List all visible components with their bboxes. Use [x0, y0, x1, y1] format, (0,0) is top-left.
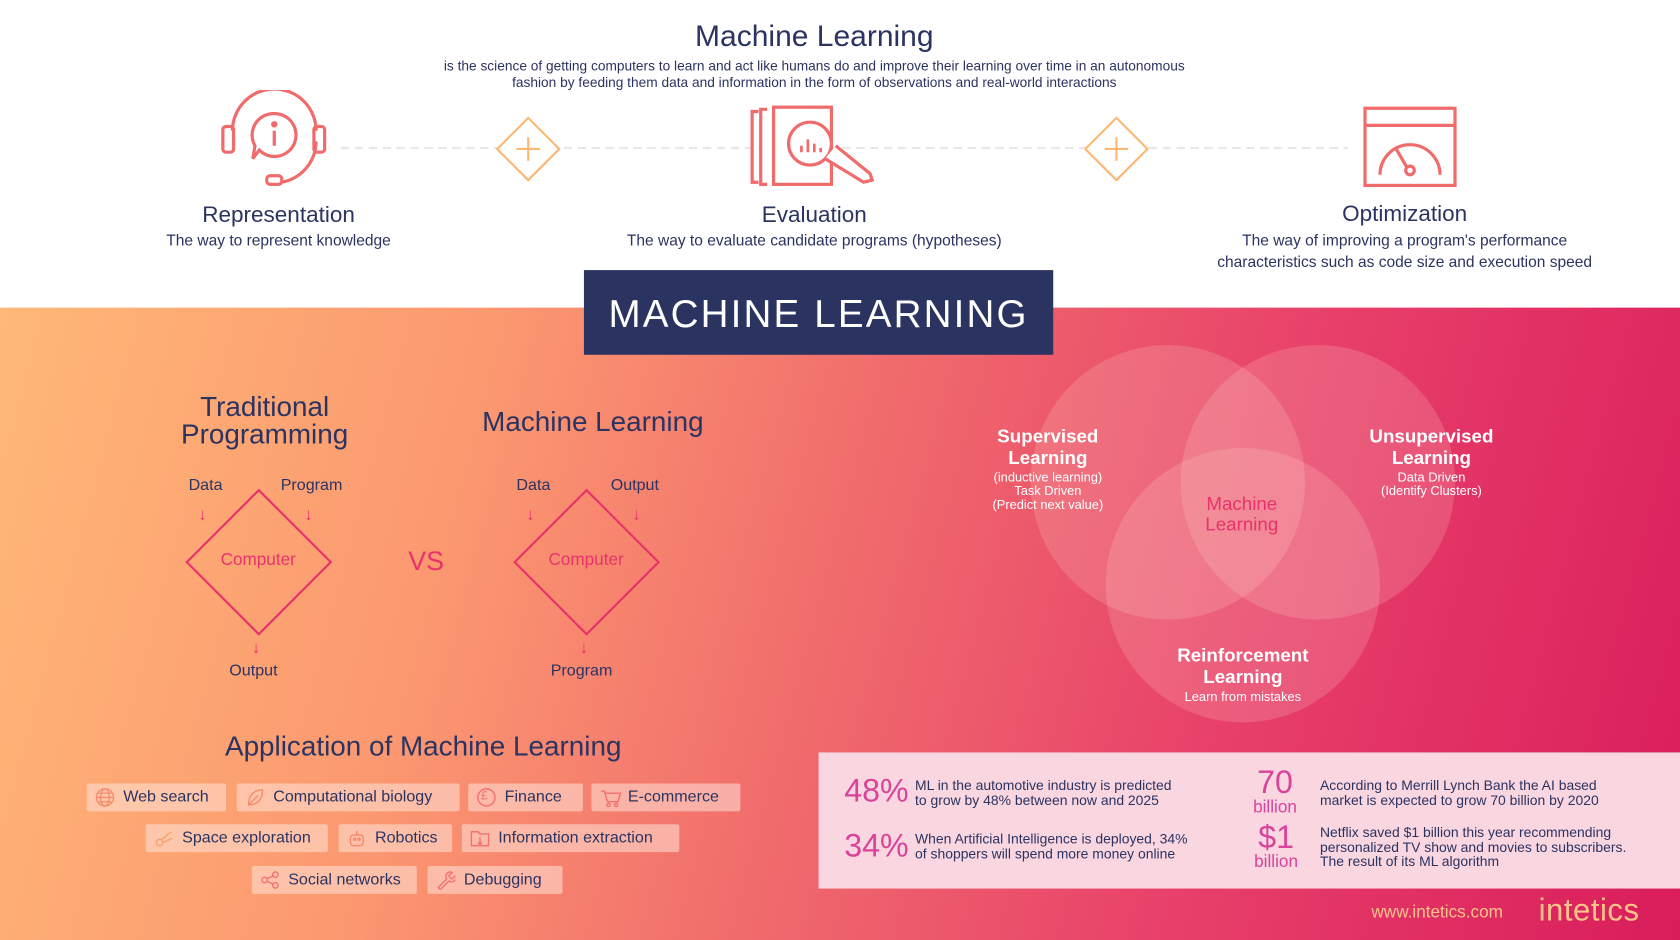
tag: finance: £	[481, 790, 488, 803]
panel: statistics	[819, 752, 1680, 889]
footer url: www.intetics.com	[1371, 904, 1503, 922]
stat: $1 billion: $1	[1258, 820, 1294, 855]
venn label: unsupervised: Data Driven	[1397, 469, 1465, 484]
stat: 70 billion	[1253, 765, 1297, 817]
venn label: center: Machine	[1206, 493, 1277, 514]
panel: machine learning flow: ↓	[632, 506, 641, 524]
venn label: supervised: Learning	[1008, 447, 1087, 468]
tag: finance	[468, 784, 583, 811]
diamond	[513, 489, 660, 636]
panel: machine learning flow: ↓	[580, 639, 588, 657]
panel: statistics: When Artificial Intelligence is deployed, 34%	[915, 831, 1188, 847]
tag: information extraction: Information extraction	[498, 829, 653, 847]
venn label: supervised	[992, 426, 1103, 512]
heading: optimization	[1217, 202, 1592, 271]
panel: traditional programming: ↓	[304, 506, 313, 524]
panel: machine learning flow: Program	[551, 661, 612, 680]
panel: machine learning flow: Output	[611, 476, 659, 494]
venn label: unsupervised: Unsupervised	[1369, 426, 1493, 447]
panel: machine learning flow	[482, 405, 704, 680]
tag: finance: Finance	[505, 788, 562, 806]
tag: web search	[87, 784, 226, 811]
venn label: unsupervised: (Identify Clusters)	[1381, 483, 1482, 498]
subtitle	[444, 58, 1185, 90]
venn label: supervised: Supervised	[997, 426, 1098, 447]
heading: evaluation	[627, 203, 1002, 250]
panel: statistics: ML in the automotive industry is predicted	[915, 777, 1172, 793]
panel: traditional programming: Computer	[221, 551, 296, 569]
subtitle: is the science of getting computers to learn and act like humans do and improve their learning over time in an autonomous	[444, 58, 1185, 74]
stat: 48%: 48%	[844, 774, 909, 809]
tag: e-commerce: E-commerce	[628, 788, 719, 806]
panel: statistics: market is expected to grow 70 billion by 2020	[1320, 792, 1599, 808]
tag: social networks: Social networks	[288, 870, 401, 889]
heading: representation: The way to represent knowledge	[166, 233, 391, 250]
tag: information extraction	[462, 824, 679, 852]
heading: optimization: The way of improving a program's performance	[1242, 233, 1567, 250]
tag: e-commerce	[591, 784, 740, 811]
application tags	[86, 784, 740, 894]
venn label: center: Learning	[1205, 513, 1278, 535]
heading: evaluation: Evaluation	[762, 203, 867, 227]
dashed connector line	[340, 147, 1348, 149]
heading	[181, 390, 348, 450]
logo: intetics: intetics	[1539, 894, 1640, 928]
venn label: supervised: Task Driven	[1014, 483, 1081, 498]
stat: 70 billion: 70	[1257, 765, 1293, 801]
panel: traditional programming	[181, 390, 348, 680]
heading: Programming	[181, 418, 348, 450]
banner: MACHINE LEARNING: MACHINE LEARNING	[609, 292, 1029, 335]
stat: $1 billion: billion	[1254, 853, 1298, 871]
icon: plus diamond 1	[496, 116, 561, 182]
subtitle: fashion by feeding them data and information in the form of observations and real-world interactions	[512, 74, 1116, 90]
panel: statistics: to grow by 48% between now and 2025	[915, 792, 1159, 808]
heading: Machine Learning	[482, 405, 704, 437]
panel: statistics: The result of its ML algorithm	[1320, 853, 1499, 869]
heading: evaluation: The way to evaluate candidate programs (hypotheses)	[627, 233, 1002, 250]
panel: traditional programming: Program	[281, 476, 342, 494]
tag: web search: Web search	[123, 788, 209, 806]
panel: statistics: According to Merrill Lynch Bank the AI based	[1320, 777, 1597, 793]
icon: headset	[221, 90, 326, 186]
stat: 34%: 34%	[844, 829, 909, 864]
venn label: supervised: (Predict next value)	[992, 497, 1103, 512]
venn label: center	[1205, 493, 1278, 535]
icon: optimization gauge	[1363, 106, 1457, 188]
tag: debugging: Debugging	[464, 870, 542, 889]
title: Machine Learning	[695, 19, 934, 53]
heading: optimization: Optimization	[1342, 202, 1467, 226]
venn diagram	[1030, 345, 1455, 722]
panel: machine learning flow: Data	[516, 476, 550, 494]
tag: robotics: Robotics	[375, 829, 438, 847]
heading: representation: Representation	[202, 203, 355, 227]
venn label: reinforcement: Learning	[1203, 666, 1282, 687]
stat: $1 billion	[1254, 820, 1298, 871]
venn label: supervised: (inductive learning)	[994, 469, 1102, 484]
venn label: unsupervised	[1369, 426, 1493, 498]
panel: traditional programming: Data	[189, 476, 223, 494]
diamond	[185, 489, 332, 636]
heading: Traditional	[200, 390, 329, 422]
venn label: reinforcement: Reinforcement	[1177, 644, 1309, 666]
tag: debugging	[428, 866, 563, 894]
panel: traditional programming: Output	[229, 661, 278, 680]
icon: plus diamond 2	[1084, 116, 1149, 182]
VS: VS	[408, 547, 444, 577]
stat: 70 billion: billion	[1253, 799, 1297, 817]
panel: machine learning flow: ↓	[526, 506, 535, 524]
icon: evaluation magnifier	[750, 106, 874, 186]
panel: statistics: of shoppers will spend more money online	[915, 845, 1175, 861]
heading: optimization: characteristics such as code size and execution speed	[1217, 254, 1592, 271]
heading: applications: Application of Machine Learning	[225, 730, 621, 762]
background gradient	[0, 308, 1680, 940]
tag: space exploration	[146, 824, 328, 852]
banner: MACHINE LEARNING	[584, 270, 1053, 355]
panel: traditional programming: ↓	[252, 639, 260, 657]
panel: statistics: personalized TV show and movies to subscribers.	[1320, 839, 1626, 855]
tag: computational biology	[237, 784, 460, 811]
heading: representation	[166, 203, 391, 250]
tag: space exploration: Space exploration	[182, 829, 311, 847]
venn label: unsupervised: Learning	[1392, 447, 1471, 468]
venn label: reinforcement	[1177, 644, 1309, 704]
tag: social networks	[252, 866, 417, 894]
panel: machine learning flow: Computer	[548, 551, 624, 569]
venn label: reinforcement: Learn from mistakes	[1185, 689, 1301, 704]
tag: robotics	[339, 824, 452, 852]
tag: computational biology: Computational biology	[273, 788, 432, 806]
panel: traditional programming: ↓	[198, 506, 207, 524]
panel: statistics: Netflix saved $1 billion this year recommending	[1320, 824, 1611, 840]
